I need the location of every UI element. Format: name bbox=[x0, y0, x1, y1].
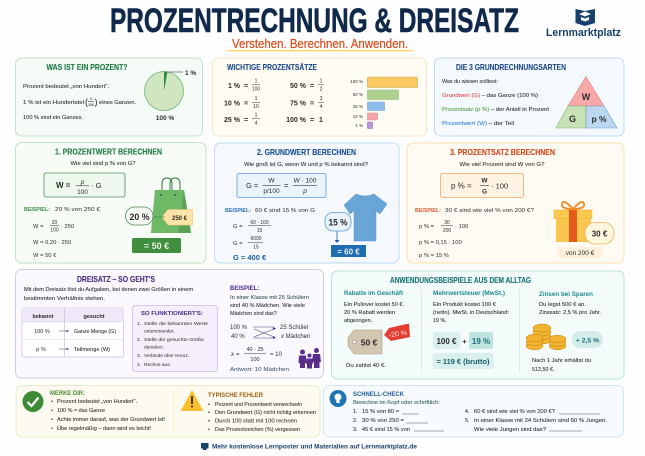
icon: light bulb bbox=[330, 390, 346, 407]
bar chart: 50 % bbox=[353, 92, 363, 97]
example: = 10 bbox=[270, 352, 283, 358]
definitions: Prozentsatz (p %) – der Anteil in Prozent bbox=[442, 107, 550, 113]
panel: Merke dir and typische Fehler bbox=[16, 386, 320, 437]
example: 15 bbox=[253, 244, 259, 250]
so funktioniert's box: Rechne aus. bbox=[144, 362, 171, 368]
Merke dir list: Übe regelmäßig – dann wird es leicht! bbox=[57, 425, 152, 432]
example: 200 bbox=[443, 228, 451, 234]
questions: 60 € sind wie viel % von 200 €? bbox=[474, 409, 555, 415]
questions: Wie viele Jungen sind das? bbox=[474, 427, 546, 433]
typische Fehler list: • bbox=[208, 418, 210, 424]
label von 200 euro bbox=[558, 247, 602, 258]
example: 100 bbox=[50, 228, 59, 234]
column: Mehrwertsteuer: Mehrwertsteuer (MwSt.) bbox=[433, 291, 505, 297]
discount tag: -20 % bbox=[389, 330, 408, 339]
icon: coins bbox=[526, 324, 566, 350]
definition text bbox=[23, 84, 136, 121]
so funktioniert's box bbox=[132, 306, 218, 372]
column: Zinsen: Zinsen bei Sparen bbox=[539, 292, 593, 298]
result: = 50 € bbox=[144, 241, 169, 251]
questions: 5. bbox=[465, 418, 470, 424]
table: bekannt bbox=[32, 314, 54, 320]
column: Zinsen bbox=[526, 292, 603, 373]
typische Fehler list: Den Grundwert (G) nicht richtig erkennen bbox=[215, 410, 316, 416]
badge 15 percent bbox=[325, 212, 351, 243]
bar chart: 25 % bbox=[353, 104, 363, 109]
badge 20 percent bbox=[126, 207, 165, 225]
questions: 45 € sind 15 % von bbox=[362, 427, 410, 433]
questions: In einer Klasse mit 24 Schülern sind 50 % Jungen. bbox=[474, 418, 607, 424]
so funktioniert's box: Verbinde über Kreuz. bbox=[144, 353, 189, 359]
fractions table: = bbox=[244, 117, 248, 124]
label von 200 euro: von 200 € bbox=[566, 250, 595, 257]
example: BEISPIEL: bbox=[225, 208, 251, 214]
typische Fehler list: Das Prozentzeichen (%) vergessen bbox=[215, 427, 300, 433]
definitions: Grundwert (G) – das Ganze (100 %) bbox=[442, 93, 538, 99]
example: In einer Klasse mit 25 Schülern bbox=[230, 295, 309, 301]
logo: Lernmarktplatz: Lernmarktplatz bbox=[546, 27, 622, 39]
definition text: 100 % sind ein Ganzes. bbox=[23, 115, 83, 121]
fractions table: 1 bbox=[255, 78, 258, 84]
fractions table: 1 % bbox=[228, 83, 241, 90]
example: = bbox=[236, 352, 240, 358]
example: Mädchen sind das? bbox=[230, 311, 277, 317]
Merke dir list: 100 % = das Ganze bbox=[57, 408, 105, 414]
example: x Mädchen bbox=[280, 334, 310, 340]
fractions table: 1 bbox=[255, 112, 258, 118]
table: Teilmenge (W) bbox=[74, 347, 110, 353]
result bbox=[132, 238, 181, 253]
example: 40 · 25 bbox=[246, 347, 264, 353]
result bbox=[331, 245, 366, 257]
example: 6000 bbox=[250, 236, 262, 242]
Merke dir list: Prozent bedeutet „von Hundert“. bbox=[57, 399, 137, 405]
definitions bbox=[442, 79, 550, 127]
column: Rabatt: abgezogen. bbox=[344, 318, 372, 324]
so funktioniert's box: daneben. bbox=[144, 344, 164, 350]
definition text: eines Ganzen. bbox=[99, 100, 136, 106]
so funktioniert's box: Stelle die gesuchte Größe bbox=[144, 337, 204, 343]
column: Zinsen: 512,50 €. bbox=[532, 367, 554, 373]
example: 25 Schüler bbox=[280, 325, 309, 331]
so funktioniert's box: 3. bbox=[137, 353, 141, 359]
questions: 2. bbox=[353, 418, 358, 424]
table: 100 % bbox=[34, 329, 50, 335]
example: 20 bbox=[52, 220, 57, 226]
icon: check mark bbox=[22, 391, 44, 412]
column: Mehrwertsteuer: Ein Produkt kostet 100 € bbox=[433, 302, 496, 308]
intro text: Mit dem Dreisatz löst du Aufgaben, bei denen zwei Größen in einem bbox=[24, 287, 194, 293]
fractions table: 4 bbox=[255, 120, 258, 126]
example: G = 400 € bbox=[233, 253, 267, 262]
heading: WAS IST EIN PROZENT? bbox=[46, 62, 128, 72]
Merke dir list: MERKE DIR: bbox=[50, 390, 85, 397]
fractions table: = bbox=[310, 83, 314, 90]
subtitle: Verstehen. Berechnen. Anwenden. bbox=[232, 37, 408, 51]
definition text: ) bbox=[94, 97, 98, 107]
panel: 3. Prozentsatz berechnen: Wie viel Prozent sind W von G? bbox=[460, 162, 545, 168]
logo: Lernmarktplatz bbox=[546, 9, 622, 39]
pie chart: 100 % bbox=[156, 115, 174, 122]
definitions: Was du wissen solltest: bbox=[442, 79, 498, 85]
fractions table bbox=[224, 78, 324, 126]
bar chart: 100 % bbox=[350, 79, 363, 84]
so funktioniert's box: untereinander. bbox=[144, 328, 175, 334]
typische Fehler list: TYPISCHE FEHLER bbox=[208, 392, 263, 399]
intro text bbox=[24, 287, 194, 302]
heading: ANWENDUNGSBEISPIELE AUS DEM ALLTAG bbox=[390, 275, 531, 285]
definition text: 100 bbox=[88, 103, 94, 107]
table: gesucht bbox=[83, 314, 105, 320]
Merke dir list: • bbox=[51, 417, 53, 423]
definitions: Prozentwert (W) – der Teil bbox=[442, 121, 514, 127]
fractions table: 10 % bbox=[224, 100, 241, 108]
bar chart bbox=[350, 77, 418, 128]
bubble 30 euro bbox=[585, 222, 614, 244]
fractions table: 4 bbox=[320, 104, 323, 110]
price tag 250 euro: 250 € bbox=[172, 216, 188, 222]
price tag: 50 € bbox=[361, 338, 378, 348]
formula: p % = bbox=[451, 182, 472, 190]
price tag 250 euro bbox=[162, 210, 192, 225]
formula: p/100 bbox=[263, 188, 280, 195]
column: Rabatt bbox=[344, 291, 410, 369]
bar chart: 1 % bbox=[355, 123, 363, 128]
fractions table: 1 bbox=[319, 117, 323, 124]
example: W = 0,20 · 250 bbox=[33, 240, 71, 246]
panel: Dreisatz bbox=[16, 270, 324, 378]
column: Zinsen: Du legst 500 € an. bbox=[539, 302, 586, 308]
icon: monitor bbox=[201, 443, 208, 450]
column: Mehrwertsteuer: 19 %. bbox=[433, 318, 447, 324]
heading: 2. GRUNDWERT BERECHNEN bbox=[257, 147, 356, 157]
example: p % = bbox=[419, 224, 435, 230]
panel: Schnell-Check bbox=[324, 386, 624, 437]
column: Mehrwertsteuer: (netto). MwSt. in Deutschland: bbox=[433, 310, 509, 316]
bar chart: 10 % bbox=[353, 114, 363, 119]
formula bbox=[44, 173, 125, 197]
fractions table: 10 bbox=[253, 104, 259, 110]
example bbox=[230, 286, 310, 373]
panel: Anwendungsbeispiele bbox=[332, 271, 624, 379]
result: = 60 € bbox=[337, 248, 360, 256]
example: 20 % von 250 € bbox=[55, 207, 101, 213]
Merke dir list: • bbox=[51, 426, 53, 432]
questions bbox=[353, 409, 607, 433]
example: BEISPIEL: bbox=[24, 207, 50, 213]
heading: WICHTIGE PROZENTSÄTZE bbox=[227, 62, 317, 72]
definition text: Prozent bedeutet „von Hundert“. bbox=[23, 84, 109, 90]
typische Fehler list bbox=[208, 392, 316, 433]
questions: 30 % von 250 = bbox=[362, 418, 404, 424]
definition text: 1 % ist ein Hundertstel bbox=[23, 100, 84, 106]
formula: G bbox=[482, 188, 487, 196]
fractions table: 1 bbox=[255, 96, 258, 102]
formula: p bbox=[302, 188, 307, 195]
column: Mehrwertsteuer: 19 % bbox=[472, 337, 490, 346]
fractions table: 75 % bbox=[290, 100, 307, 108]
Merke dir list bbox=[50, 390, 166, 432]
column: Mehrwertsteuer bbox=[432, 291, 509, 369]
panel: Schnell-Check: Berechne im Kopf oder schriftlich: bbox=[353, 400, 440, 406]
fractions table: 1 bbox=[320, 78, 323, 84]
badge 20 percent: 20 % bbox=[130, 212, 150, 222]
badge 2,5 percent: + 2,5 % bbox=[576, 338, 599, 344]
Merke dir list: • bbox=[51, 408, 53, 414]
so funktioniert's box: 2. bbox=[137, 337, 141, 343]
heading: 1. PROZENTWERT BERECHNEN bbox=[55, 146, 162, 156]
column: Rabatt: Du zahlst 40 €. bbox=[346, 363, 386, 369]
questions: 4. bbox=[465, 409, 470, 415]
example bbox=[415, 208, 535, 259]
pie chart: 1 % bbox=[185, 70, 196, 77]
questions: 1. bbox=[353, 409, 358, 415]
example: 100 % bbox=[230, 325, 248, 331]
formula bbox=[237, 174, 326, 198]
heading: DREISATZ – SO GEHT'S bbox=[77, 274, 155, 284]
example: 30 € sind wie viel % von 200 €? bbox=[445, 208, 535, 214]
column: Mehrwertsteuer: 100 € bbox=[436, 337, 457, 346]
formula: · G bbox=[91, 181, 102, 190]
table: p % bbox=[36, 347, 46, 353]
pie chart bbox=[144, 70, 196, 122]
panel: die 3 Grundrechnungsarten bbox=[434, 58, 624, 136]
example: · 250 bbox=[61, 224, 74, 230]
example: 60 € sind 15 % von G bbox=[255, 208, 316, 214]
column: Rabatt: 20 % Rabatt werden bbox=[344, 310, 395, 316]
fractions table: 25 % bbox=[224, 117, 241, 124]
typische Fehler list: • bbox=[208, 402, 210, 408]
icon: shopping bag bbox=[151, 178, 191, 233]
heading: 3. PROZENTSATZ BERECHNEN bbox=[450, 147, 555, 157]
icon: warning triangle bbox=[182, 391, 202, 410]
intro text: bestimmten Verhältnis stehen. bbox=[24, 296, 105, 302]
formula: W = bbox=[56, 181, 71, 190]
example: W = bbox=[33, 224, 44, 230]
example: BEISPIEL: bbox=[230, 286, 259, 292]
triangle diagram: W bbox=[582, 92, 591, 102]
formula: · 100 bbox=[491, 182, 508, 190]
example: · 100 bbox=[455, 224, 468, 230]
fractions table: = bbox=[310, 117, 314, 124]
heading: SCHNELL-CHECK bbox=[353, 391, 404, 398]
typische Fehler list: Prozent und Prozentwert verwechseln bbox=[215, 402, 302, 408]
example: G = bbox=[233, 224, 243, 230]
column: Mehrwertsteuer: + bbox=[462, 337, 467, 346]
Merke dir list: Achte immer darauf, was der Grundwert ist! bbox=[57, 417, 166, 423]
bubble 30 euro: 30 € bbox=[592, 230, 608, 238]
so funktioniert's box: Stelle die bekannten Werte bbox=[144, 321, 208, 327]
formula: = bbox=[284, 181, 289, 190]
example: 30 bbox=[444, 220, 450, 226]
definition text: 1 bbox=[90, 96, 93, 101]
example bbox=[24, 207, 101, 259]
typische Fehler list: • bbox=[208, 410, 210, 416]
example: Antwort: 10 Mädchen bbox=[230, 367, 289, 373]
questions: 3. bbox=[353, 427, 358, 433]
icon: gift box bbox=[554, 202, 592, 242]
Merke dir list: • bbox=[51, 399, 53, 405]
table: Ganze Menge (G) bbox=[74, 329, 116, 335]
triangle diagram: p % bbox=[591, 114, 607, 124]
example: BEISPIEL: bbox=[415, 208, 441, 214]
column: Rabatt: Rabatte im Geschäft bbox=[344, 291, 403, 297]
triangle diagram bbox=[556, 76, 617, 128]
formula: W · 100 bbox=[294, 178, 317, 184]
triangle diagram: G bbox=[569, 114, 576, 124]
fractions table: 100 % bbox=[286, 117, 307, 124]
column: Zinsen: Nach 1 Jahr erhältst du bbox=[532, 358, 591, 364]
formula: W bbox=[481, 178, 488, 184]
fractions table: = bbox=[244, 100, 248, 108]
fractions table: = bbox=[244, 83, 248, 90]
example: p % = 15 % bbox=[419, 253, 449, 259]
panel: 2. Grundwert berechnen bbox=[214, 143, 399, 263]
typische Fehler list: • bbox=[208, 427, 210, 433]
fractions table: 50 % bbox=[290, 83, 307, 90]
table bbox=[22, 308, 124, 357]
icon: group of children bbox=[298, 348, 321, 368]
so funktioniert's box: 4. bbox=[137, 362, 141, 368]
formula: 100 bbox=[77, 189, 88, 196]
definition text: ( bbox=[85, 97, 88, 107]
panel: 3. Prozentsatz berechnen bbox=[407, 143, 624, 263]
example: x bbox=[230, 352, 235, 358]
so funktioniert's box: SO FUNKTIONIERT'S: bbox=[141, 311, 203, 317]
example: sind 40 % Mädchen. Wie viele bbox=[230, 303, 305, 309]
example: G = bbox=[233, 241, 243, 247]
fractions table: 100 bbox=[252, 86, 260, 92]
formula bbox=[440, 174, 524, 198]
example: 60 · 100 bbox=[250, 220, 269, 226]
example: p % = 0,15 · 100 bbox=[419, 240, 462, 246]
formula: p bbox=[80, 179, 85, 186]
so funktioniert's box: 1. bbox=[137, 321, 141, 327]
example bbox=[225, 208, 316, 262]
typische Fehler list: Durch 100 statt mit 100 rechnen bbox=[215, 418, 297, 424]
panel: wichtige Prozentsätze bbox=[212, 58, 426, 136]
example: W = 50 € bbox=[33, 253, 57, 259]
column: Mehrwertsteuer: = 119 € (brutto) bbox=[436, 357, 490, 366]
panel: 1. Prozentwert berechnen: Wie viel sind p % von G? bbox=[70, 161, 136, 167]
formula: G = bbox=[246, 181, 259, 190]
formula: W bbox=[268, 178, 275, 184]
fractions table: = bbox=[310, 100, 314, 108]
heading: DIE 3 GRUNDRECHNUNGSARTEN bbox=[456, 62, 566, 72]
example: 100 bbox=[250, 357, 260, 363]
footer: Mehr kostenlose Lernposter und Materialien auf Lernmarktplatz.de bbox=[212, 444, 417, 450]
example: 15 bbox=[257, 228, 262, 234]
column: Zinsen: Zinssatz: 2,5 % pro Jahr. bbox=[539, 310, 601, 316]
example: 40 % bbox=[231, 334, 245, 340]
panel: 1. Prozentwert berechnen bbox=[16, 142, 206, 263]
badge 15 percent: 15 % bbox=[328, 218, 348, 228]
fractions table: 3 bbox=[320, 96, 323, 102]
panel: 2. Grundwert berechnen: Wie groß ist G, wenn W und p % bekannt sind? bbox=[244, 162, 368, 168]
panel: was ist ein Prozent bbox=[16, 58, 202, 136]
questions: 15 % von 80 = bbox=[362, 409, 399, 415]
icon: t-shirt bbox=[344, 194, 387, 241]
fractions table: 2 bbox=[320, 86, 323, 92]
column: Rabatt: Ein Pullover kostet 50 €. bbox=[344, 302, 404, 308]
